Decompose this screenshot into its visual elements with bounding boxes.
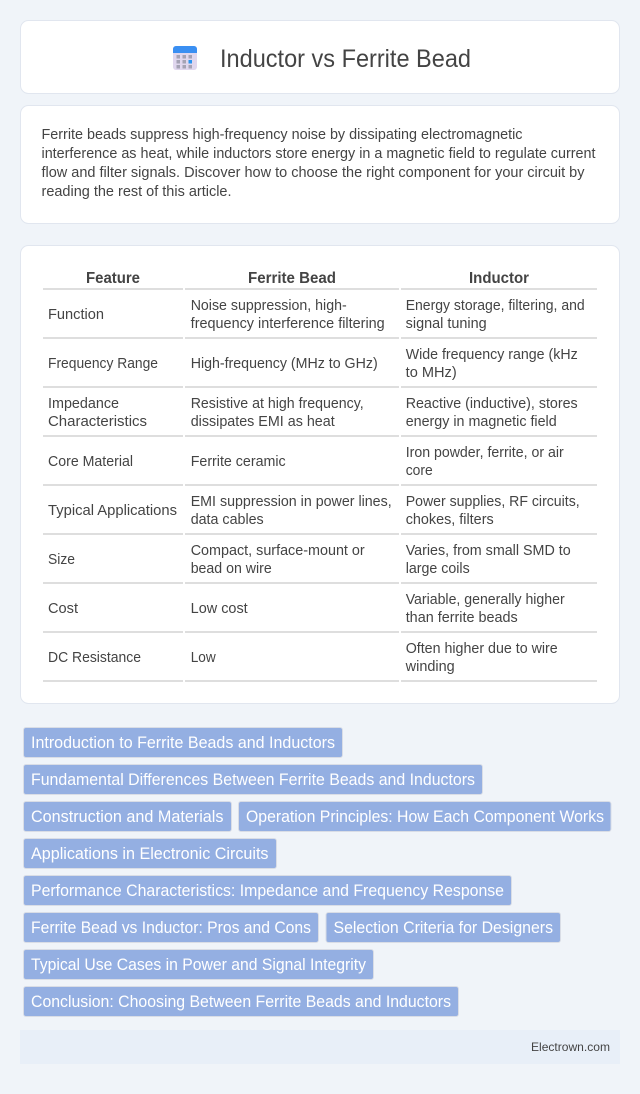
panel: comparison table (20, 246, 620, 704)
row: function: signal tuning (406, 316, 487, 332)
title: Inductor vs Ferrite Bead (220, 45, 471, 73)
row: dc resistance: Low (191, 650, 216, 666)
link: performance: Performance Characteristics: Impedance and Frequency Response (31, 882, 504, 900)
intro text (42, 127, 596, 200)
link: selection criteria (326, 912, 560, 942)
row: typical applications (48, 494, 580, 528)
row: frequency range (48, 347, 578, 381)
row: frequency range: Frequency Range (48, 356, 158, 372)
row: typical applications: EMI suppression in power lines, (191, 494, 392, 510)
table header: Feature (86, 270, 140, 287)
row: impedance characteristics: Resistive at high frequency, (191, 396, 364, 412)
link: introduction: Introduction to Ferrite Beads and Inductors (31, 734, 335, 752)
row: impedance characteristics: dissipates EMI as heat (191, 414, 335, 430)
row: impedance characteristics (48, 396, 578, 430)
intro text: Ferrite beads suppress high-frequency noise by dissipating electromagnetic (42, 127, 522, 143)
row: size: Varies, from small SMD to (406, 543, 571, 559)
row: function: Noise suppression, high- (191, 298, 347, 314)
row: size (48, 543, 571, 577)
row: size: Compact, surface-mount or (191, 543, 365, 559)
row: typical applications: Power supplies, RF circuits, (406, 494, 580, 510)
row: dc resistance: winding (405, 659, 455, 675)
row: dc resistance (48, 641, 558, 675)
row: dc resistance: DC Resistance (48, 650, 141, 666)
table header (86, 270, 529, 287)
footer (20, 1030, 620, 1064)
link: applications: Applications in Electronic Circuits (31, 845, 268, 863)
row: impedance characteristics: Impedance (48, 396, 119, 412)
intro text: flow and filter signals. Discover how to choose the right component for your circuit by (42, 165, 585, 181)
link: operation principles (238, 802, 611, 832)
row: typical applications: data cables (191, 512, 264, 528)
intro text: interference as heat, while inductors store energy in a magnetic field to regulate current (42, 146, 596, 162)
row: core material: core (406, 463, 433, 479)
link: conclusion (24, 986, 458, 1016)
panel: topic links (24, 728, 611, 1016)
link: construction (24, 802, 232, 832)
row: function: Energy storage, filtering, and (406, 298, 585, 314)
link: use cases: Typical Use Cases in Power and Signal Integrity (31, 956, 367, 974)
row: size: bead on wire (191, 561, 272, 577)
link: pros and cons (24, 912, 318, 942)
row: function: Function (48, 307, 104, 323)
row: dc resistance: Often higher due to wire (406, 641, 558, 657)
row: typical applications: chokes, filters (406, 512, 494, 528)
row: frequency range: to MHz) (406, 365, 457, 381)
link: selection criteria: Selection Criteria for Designers (334, 919, 553, 937)
link: fundamental differences (24, 764, 482, 794)
link: conclusion: Conclusion: Choosing Between Ferrite Beads and Inductors (31, 993, 451, 1011)
row: cost: Cost (48, 601, 78, 617)
row: frequency range: High-frequency (MHz to GHz) (191, 356, 378, 372)
panel: header (20, 20, 620, 94)
row: cost (48, 592, 565, 626)
row: function: frequency interference filtering (191, 316, 385, 332)
row: core material: Iron powder, ferrite, or air (406, 445, 564, 461)
row: typical applications: Typical Applications (48, 503, 177, 519)
row: core material: Ferrite ceramic (191, 454, 286, 470)
footer: Electrown.com (531, 1040, 610, 1054)
row: impedance characteristics: Characteristics (48, 414, 147, 430)
link: performance (24, 876, 512, 906)
link: fundamental differences: Fundamental Differences Between Ferrite Beads and Inductors (31, 771, 475, 789)
row: core material: Core Material (48, 454, 133, 470)
icon: calendar (173, 46, 197, 70)
row: cost: than ferrite beads (406, 610, 518, 626)
link: pros and cons: Ferrite Bead vs Inductor: Pros and Cons (31, 919, 311, 937)
row: size: Size (48, 552, 75, 568)
intro text: reading the rest of this article. (42, 184, 232, 200)
table header: Inductor (469, 270, 529, 287)
row: core material (48, 445, 564, 479)
link: construction: Construction and Materials (31, 808, 224, 826)
link: operation principles: Operation Principles: How Each Component Works (246, 808, 604, 826)
row: impedance characteristics: Reactive (inductive), stores (406, 396, 578, 412)
row: frequency range: Wide frequency range (kHz (406, 347, 578, 363)
link: introduction (24, 728, 342, 758)
row: function (48, 298, 585, 332)
link: use cases (24, 950, 374, 980)
link: applications (24, 838, 276, 868)
row: cost: Low cost (191, 601, 248, 617)
table header: Ferrite Bead (248, 270, 336, 287)
row: impedance characteristics: energy in magnetic field (406, 414, 557, 430)
row: cost: Variable, generally higher (406, 592, 565, 608)
panel: introduction (20, 106, 620, 224)
row: size: large coils (406, 561, 470, 577)
